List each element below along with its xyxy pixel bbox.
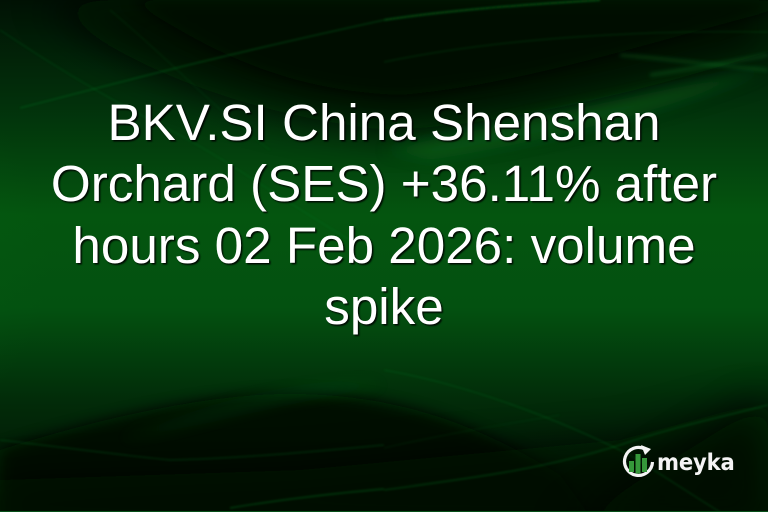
title — [51, 94, 718, 337]
title: Orchard (SES) +36.11% after — [51, 155, 717, 212]
icon: circular arrow with bars — [622, 445, 654, 477]
title: spike — [324, 278, 444, 335]
wordmark: meyka — [657, 448, 735, 476]
title: BKV.SI China Shenshan — [107, 94, 661, 151]
title: hours 02 Feb 2026: volume — [72, 217, 696, 274]
logo: meyka — [622, 445, 735, 477]
